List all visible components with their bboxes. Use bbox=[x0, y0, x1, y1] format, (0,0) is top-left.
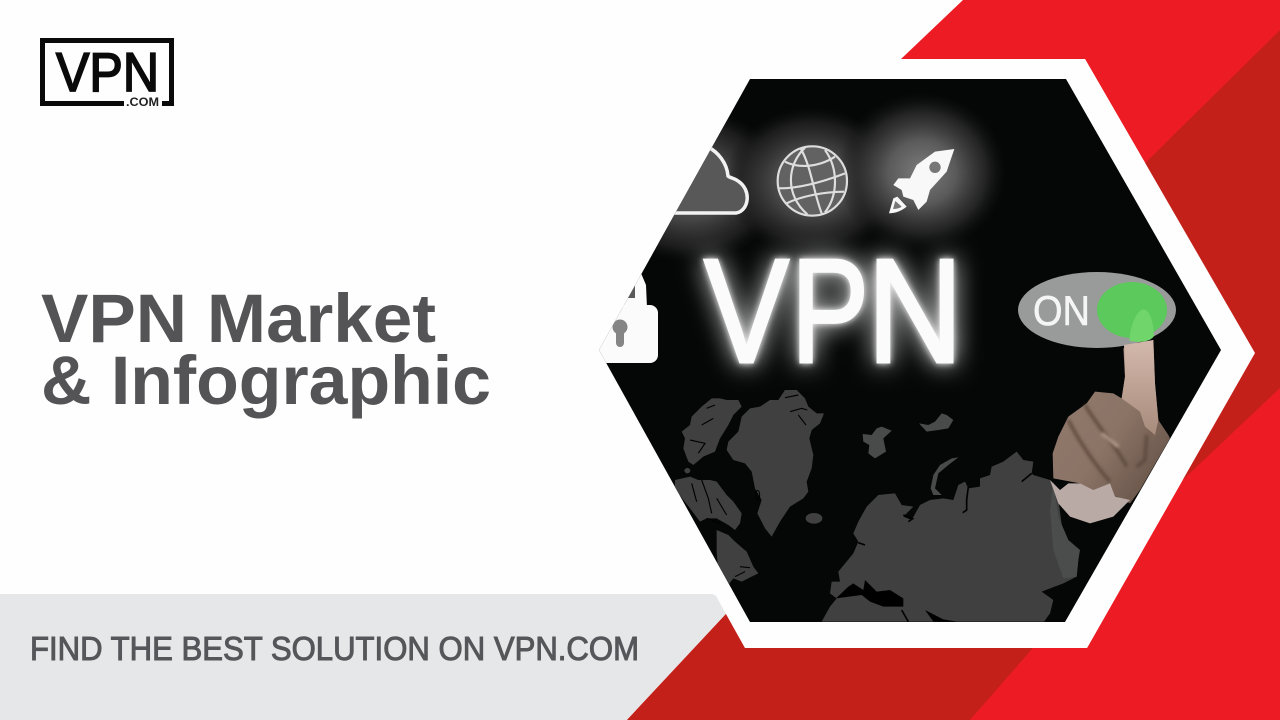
greenland bbox=[727, 390, 824, 537]
baffin island bbox=[675, 477, 742, 530]
big VPN lettering: P bbox=[791, 229, 869, 394]
big VPN lettering bbox=[704, 229, 963, 394]
fjord channels bbox=[690, 395, 807, 577]
icon: globe bbox=[778, 146, 847, 216]
logo suffix: .COM bbox=[126, 97, 159, 109]
small island bbox=[684, 468, 690, 473]
icon: rocket bbox=[889, 149, 954, 213]
novaya zemlya bbox=[931, 457, 958, 495]
title: VPN Market bbox=[41, 280, 436, 357]
icon glows bbox=[653, 100, 998, 255]
world map east bbox=[822, 413, 1080, 622]
big VPN lettering: N bbox=[867, 229, 963, 394]
index finger bbox=[1122, 340, 1158, 435]
knuckle shadows bbox=[1068, 405, 1147, 482]
hexagon photo bbox=[590, 70, 1230, 630]
world map west bbox=[675, 390, 824, 585]
title: & Infographic bbox=[41, 342, 491, 419]
logo bbox=[42, 40, 172, 109]
sleeve shading bbox=[1050, 482, 1080, 578]
hand pressing switch bbox=[1050, 309, 1170, 523]
svalbard bbox=[863, 427, 892, 458]
persian gulf bbox=[925, 610, 957, 622]
title bbox=[41, 280, 491, 419]
shirt cuff bbox=[1050, 480, 1130, 523]
white hexagon frame bbox=[580, 59, 1255, 648]
fingertip on green button bbox=[1129, 309, 1154, 342]
red background shapes bbox=[627, 0, 1280, 720]
coastal inlets bbox=[858, 473, 1032, 622]
toggle label: ON bbox=[1033, 287, 1090, 334]
mediterranean bbox=[836, 580, 903, 607]
eurasia and africa bbox=[822, 452, 1078, 622]
franz josef land bbox=[919, 413, 953, 432]
north america mainland bbox=[717, 530, 758, 585]
ellesmere island bbox=[682, 398, 742, 465]
logo wordmark: VPN bbox=[56, 41, 159, 103]
big VPN lettering: V bbox=[704, 229, 789, 394]
icon: padlock bbox=[599, 274, 658, 363]
toggle switch bbox=[1018, 272, 1176, 348]
footer text: FIND THE BEST SOLUTION ON VPN.COM bbox=[30, 630, 639, 667]
iceland west bbox=[806, 513, 822, 524]
icon: cloud bbox=[674, 147, 749, 215]
footer band bbox=[0, 594, 726, 720]
